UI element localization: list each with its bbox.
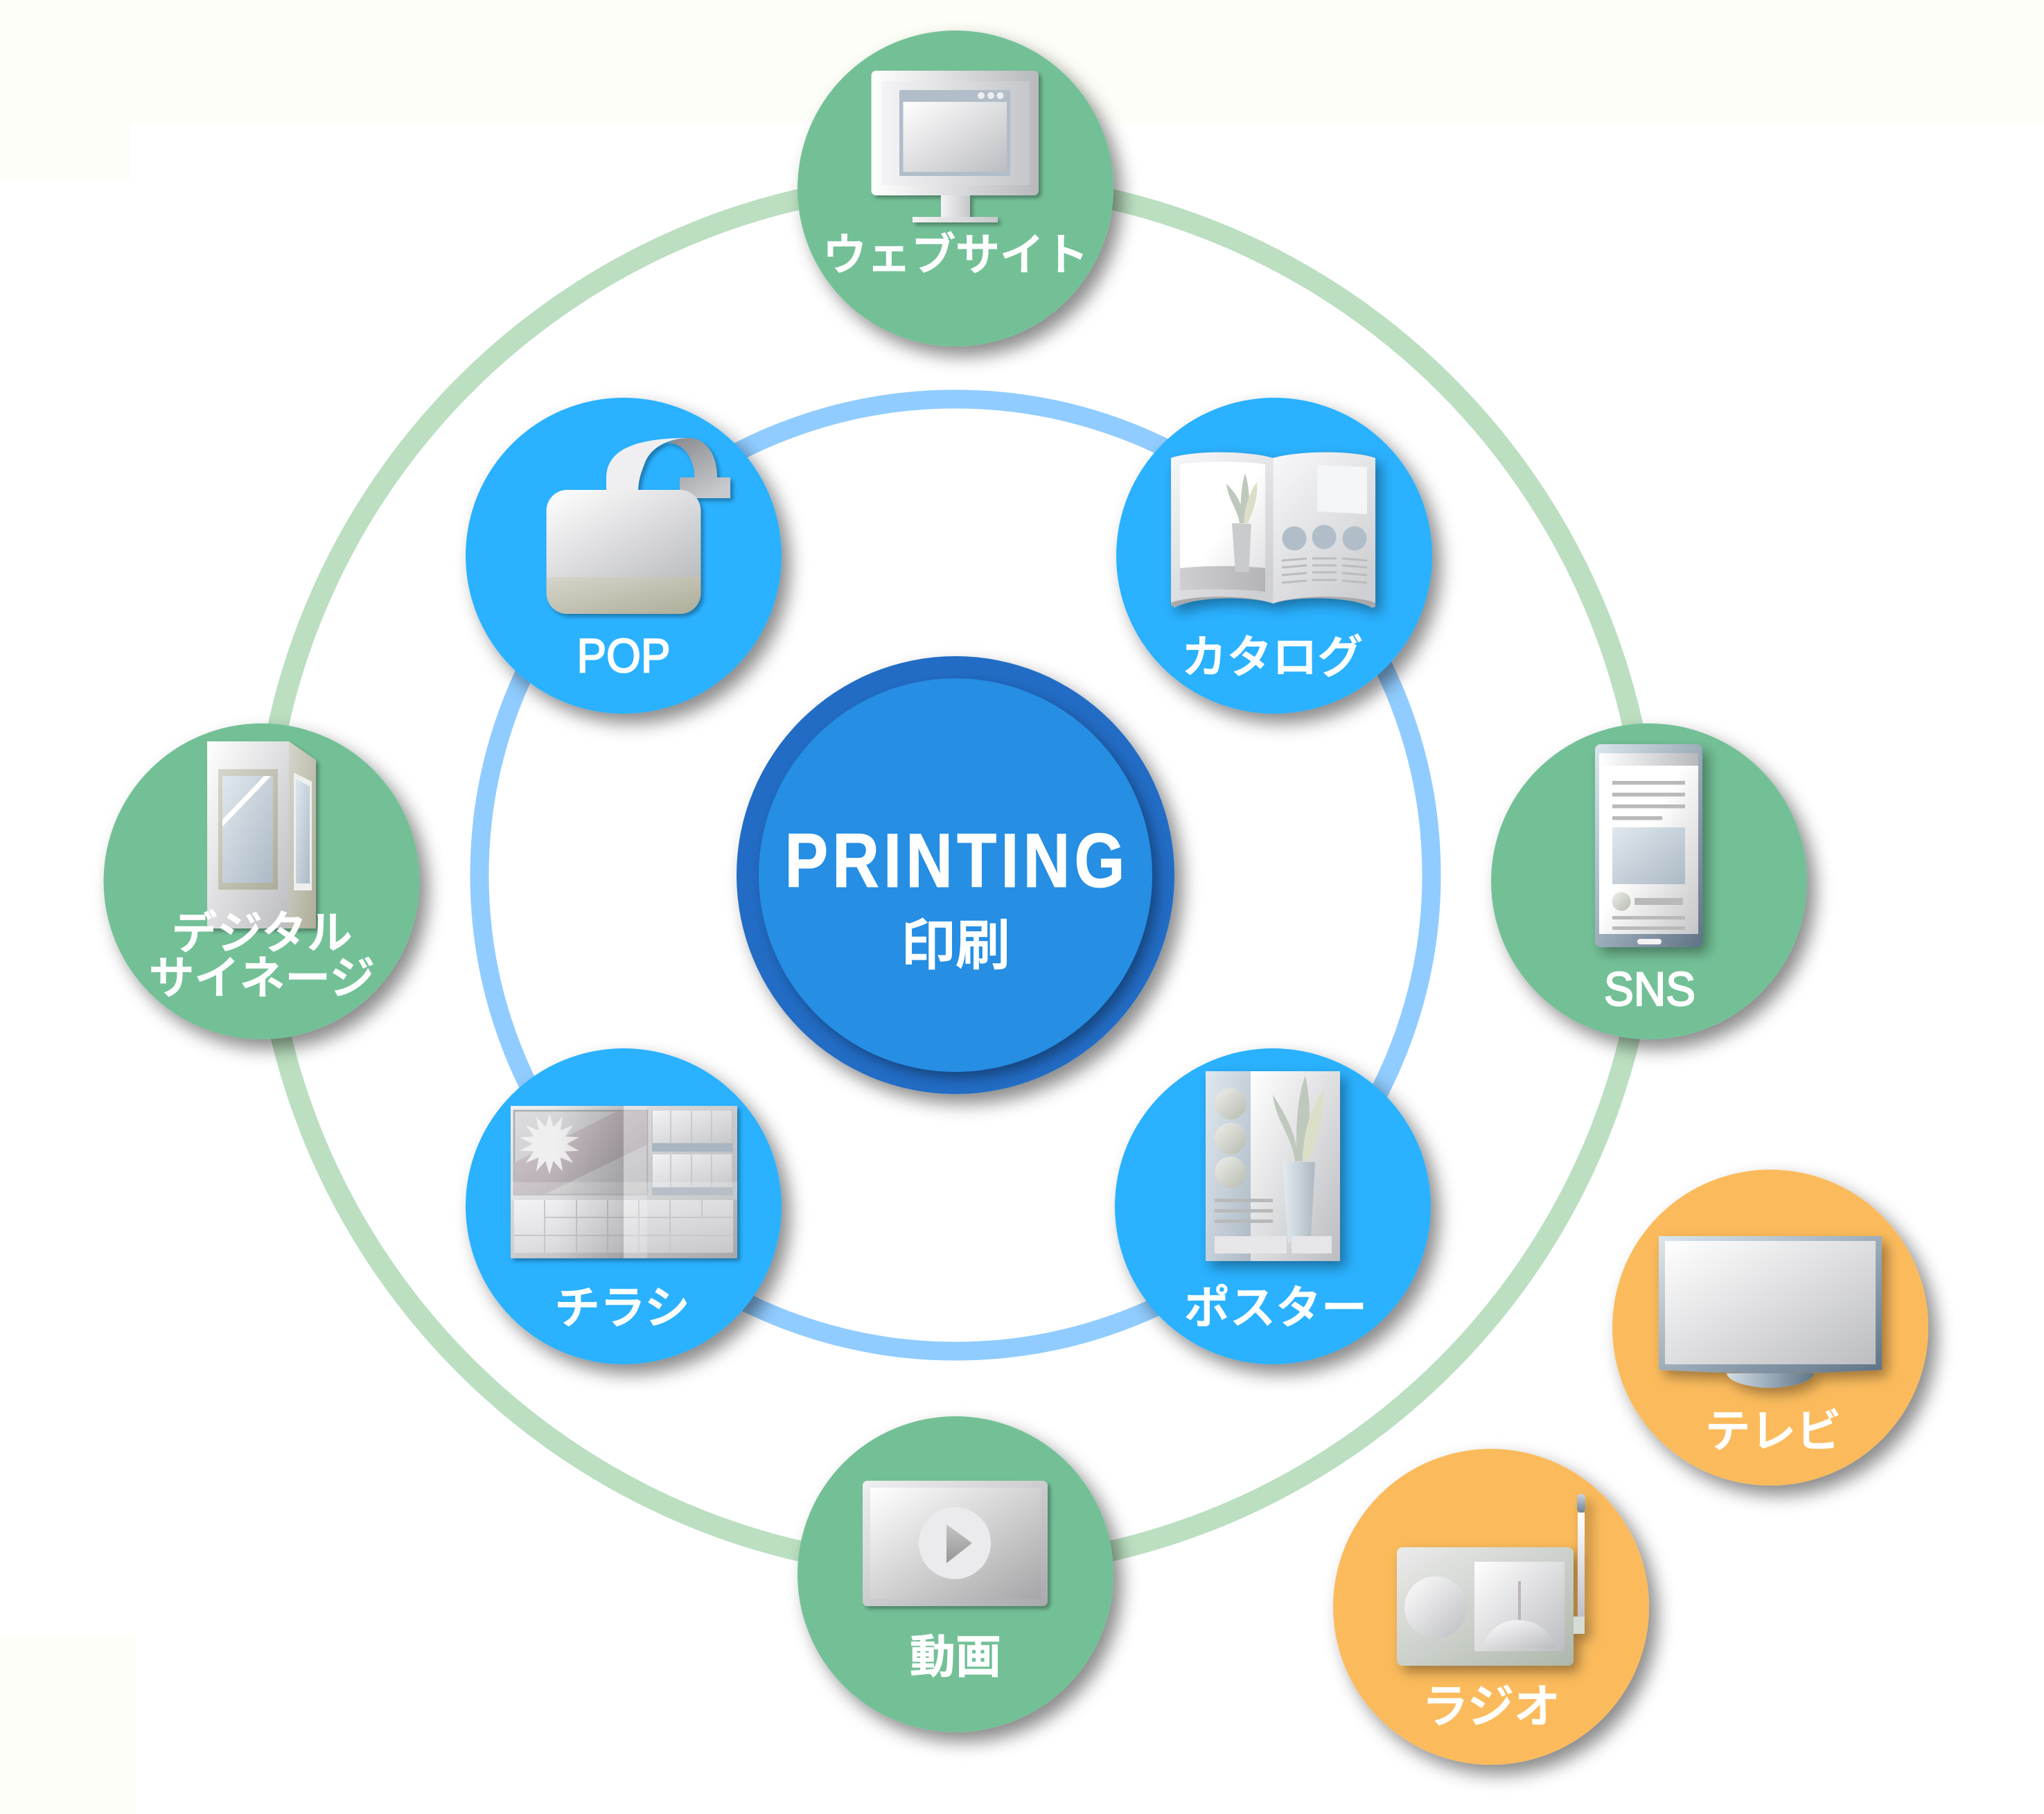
outer ring: digital media [262, 182, 1649, 1569]
icon: radio [1397, 1494, 1585, 1666]
label: website: ウェブサイト [822, 230, 1089, 280]
label: digital signage: デジタル [172, 908, 352, 958]
label: video: 動画 [910, 1631, 1001, 1682]
label: digital signage: サイネージ [149, 953, 375, 1003]
label: catalog: カタログ [1181, 632, 1363, 683]
icon: flyer [511, 1106, 737, 1258]
inner ring: print media [479, 399, 1431, 1351]
node: catalog [1116, 398, 1432, 714]
node: POP [466, 398, 782, 714]
node: poster [1115, 1048, 1431, 1364]
label: radio: ラジオ [1422, 1681, 1560, 1733]
node: television [1612, 1170, 1928, 1486]
icon: catalog book [1171, 452, 1375, 608]
icon: smartphone [1595, 744, 1702, 947]
label: poster: ポスター [1184, 1282, 1367, 1333]
icon: POP sign [547, 438, 730, 614]
label: digital signage [149, 908, 375, 1003]
node: radio [1333, 1449, 1649, 1765]
label: SNS: SNS [1604, 962, 1695, 1016]
node: video [798, 1416, 1113, 1732]
icon: signage kiosk [207, 741, 316, 928]
node: website [798, 30, 1113, 346]
subheading: 印刷: 印刷 [901, 915, 1010, 976]
label: flyer: チラシ [554, 1283, 690, 1333]
node: SNS [1491, 723, 1807, 1039]
label: television: テレビ [1705, 1406, 1841, 1456]
icon: video player [863, 1481, 1048, 1606]
heading: PRINTING: PRINTING [784, 818, 1129, 904]
node: flyer [466, 1048, 782, 1364]
node: digital signage [104, 723, 420, 1039]
icon: television [1659, 1236, 1882, 1388]
label: POP: POP [576, 629, 671, 683]
icon: poster [1206, 1071, 1340, 1261]
icon: monitor [872, 71, 1039, 222]
center hub: printing [737, 656, 1174, 1094]
